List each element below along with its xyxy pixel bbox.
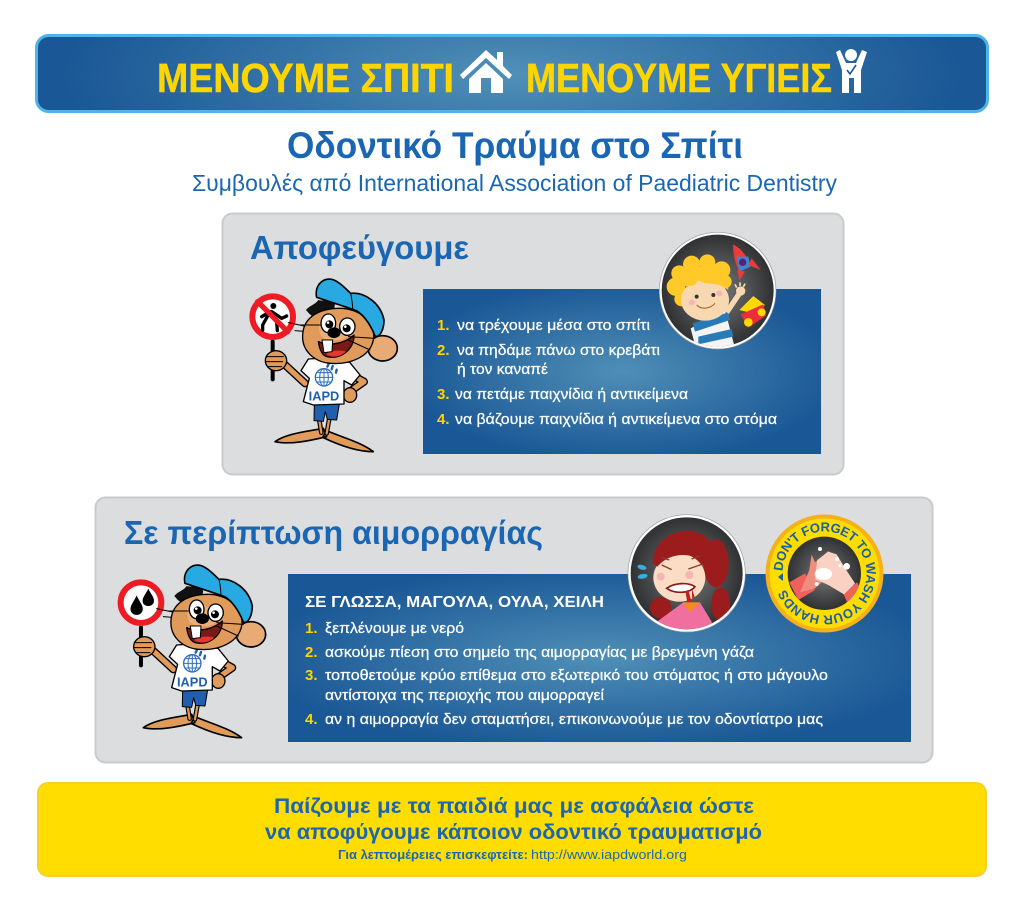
icon: house (460, 50, 512, 93)
list item 3: τοποθετούμε κρύο επίθεμα στο εξωτερικό του στόματος ή στο μάγουλο (325, 667, 828, 684)
panel: avoid (222, 214, 844, 474)
list item 2: 2. (305, 644, 318, 661)
list item 2: να πηδάμε πάνω στο κρεβάτι (457, 342, 660, 359)
list heading: ΣΕ ΓΛΩΣΣΑ, ΜΑΓΟΥΛΑ, ΟΥΛΑ, ΧΕΙΛΗ (305, 594, 604, 611)
badge: wash your hands (766, 514, 884, 632)
list item 2 (437, 342, 660, 378)
mascot with no-running sign (249, 279, 397, 452)
list item 1: 1. (305, 620, 318, 637)
footer link (338, 848, 687, 862)
list item 4: 4. (305, 711, 318, 728)
list item 3: αντίστοιχα της περιοχής που αιμορραγεί (325, 687, 605, 704)
list item 1: ξεπλένουμε με νερό (325, 620, 464, 637)
list item 3: 3. (305, 667, 318, 684)
banner slogan left: ΜΕΝΟΥΜΕ ΣΠΙΤΙ (157, 55, 454, 101)
footer link: http://www.iapdworld.org (531, 848, 687, 862)
hands illustration (788, 537, 865, 610)
heading: bleeding: Σε περίπτωση αιμορραγίας (124, 514, 543, 551)
list item 3: 3. (437, 386, 450, 403)
list item 2: ή τον καναπέ (457, 361, 548, 378)
ring marker (778, 573, 783, 581)
list item 2: ασκούμε πίεση στο σημείο της αιμορραγίας με βρεγμένη γάζα (325, 644, 754, 661)
banner (36, 36, 988, 112)
list item 4: αν η αιμορραγία δεν σταματήσει, επικοινωνούμε με τον οδοντίατρο μας (325, 711, 823, 728)
list item 1: 1. (437, 317, 450, 334)
footer link: Για λεπτομέρειες επισκεφτείτε: (338, 848, 528, 862)
list item 4: να βάζουμε παιχνίδια ή αντικείμενα στο στόμα (455, 411, 777, 428)
mascot with blood drop sign (118, 565, 266, 738)
heading: avoid: Αποφεύγουμε (250, 229, 469, 266)
subtitle: Συμβουλές από International Association of Paediatric Dentistry (192, 170, 837, 196)
list item 1: να τρέχουμε μέσα στο σπίτι (457, 317, 650, 334)
list item 2: 2. (437, 342, 450, 359)
mascot with no-running sign: IAPD (309, 390, 339, 404)
title: Οδοντικό Τραύμα στο Σπίτι (287, 125, 743, 166)
list item 3: να πετάμε παιχνίδια ή αντικείμενα (455, 386, 688, 403)
icon: healthy person (836, 49, 867, 93)
footer line 1: Παίζουμε με τα παιδιά μας με ασφάλεια ώστε (274, 794, 754, 818)
panel: footer (38, 783, 986, 876)
icon: girl with injured mouth (628, 515, 745, 632)
badge text ring: DON'T FORGET TO WASH YOUR HANDS (774, 522, 876, 624)
footer line 2: να αποφύγουμε κάποιον οδοντικό τραυματισμό (265, 820, 762, 844)
instruction box: avoid (423, 289, 821, 454)
mascot with blood drop sign: IAPD (177, 676, 208, 690)
instruction box: bleeding (288, 574, 911, 742)
panel: bleeding (94, 496, 934, 764)
list item 4: 4. (437, 411, 450, 428)
banner slogan right: ΜΕΝΟΥΜΕ ΥΓΙΕΙΣ (526, 55, 832, 101)
list item 3 (305, 667, 828, 704)
icon: boy with toys (659, 232, 776, 352)
